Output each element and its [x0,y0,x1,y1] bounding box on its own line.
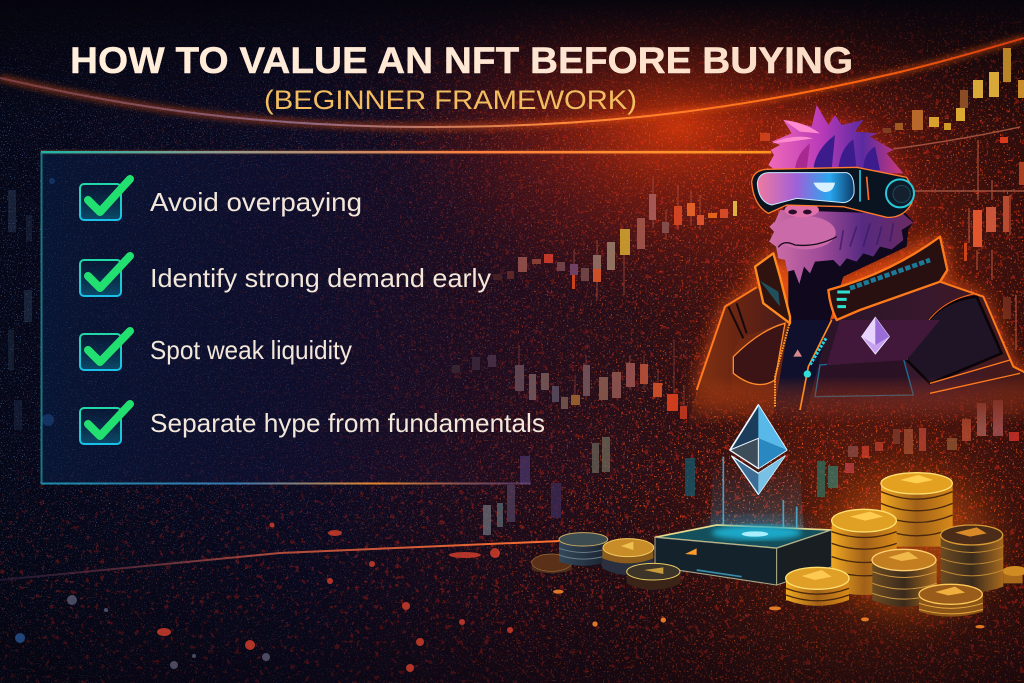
coin stack: mid gold [832,509,897,595]
coin stack: gold and navy [602,539,654,575]
candlestick chart: upper trail [493,178,737,300]
jacket collar [755,237,947,323]
candlestick chart: dim blue left edge [8,190,32,430]
thin lines right of the ape [893,127,1024,191]
icon: ethereum badge on jacket [862,317,889,354]
hair [768,105,903,173]
coin stack: front right [919,584,983,617]
hologram platform with coins [532,405,1024,628]
checklist item 3: text: Spot weak liquidity [150,335,352,365]
ape character in VR goggles and jacket [687,105,1024,430]
icon: floating ethereum diamond [730,405,787,494]
title: HOW TO VALUE AN NFT BEFORE BUYING [70,40,853,81]
panel: checklist [40,150,771,484]
platform box [655,525,832,585]
decorative orange arc behind title [0,38,1024,127]
checklist item 4: text: Separate hype from fundamentals [150,408,545,438]
hologram beams [703,457,810,542]
coin stack: rear right dark [941,525,1003,592]
checklist item 2: checkbox icon [80,256,130,296]
checklist item 2: text: Identify strong demand early [150,263,491,293]
checklist item 1: checkbox icon [80,179,130,220]
head and fur [769,203,913,320]
coin stack: blue steel [559,533,608,566]
coin glow [830,477,990,610]
subtitle: (BEGINNER FRAMEWORK) [264,85,637,115]
candlestick chart: lower trail [452,340,687,419]
checklist item 4: checkbox icon [80,404,130,444]
checklist item 1: text: Avoid overpaying [150,187,362,217]
coin stack: front dark gold [627,563,681,590]
coin stacks [532,473,1024,617]
lower horizon line [0,541,560,580]
coin stack: centre gold and dark [872,549,937,607]
candlestick chart: bottom and right candles [483,48,1024,535]
jacket [687,282,1024,430]
coin stack: small brown [532,554,572,573]
checklist item 3: checkbox icon [80,331,130,370]
ground sparks [553,590,985,628]
coin stack: tall rear gold [881,473,953,547]
coin stack: front gold [786,567,849,606]
coin stack: partial right edge [1002,566,1024,583]
VR goggles [752,167,914,217]
